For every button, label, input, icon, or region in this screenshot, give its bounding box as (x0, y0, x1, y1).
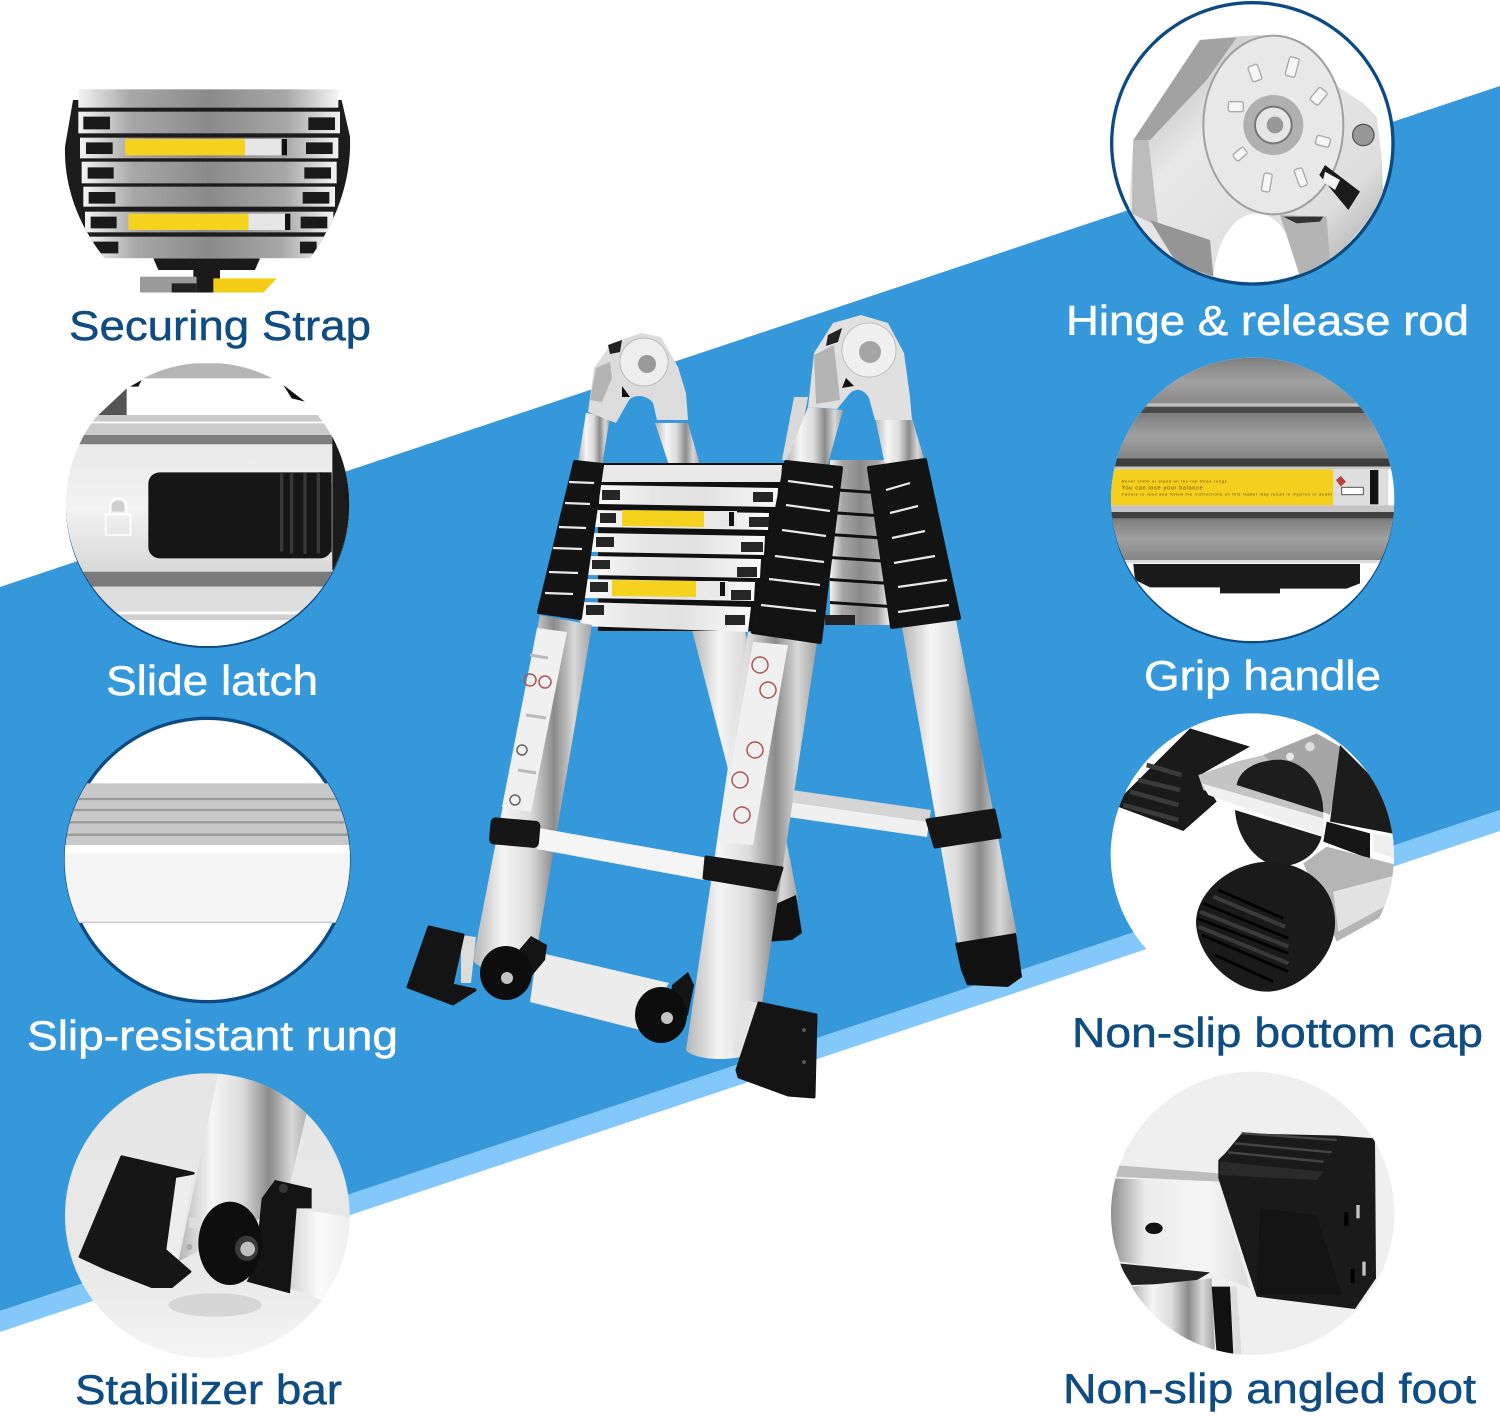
background: light blue stripe (0, 810, 1500, 1332)
panel: non-slip angled foot (1063, 1072, 1476, 1412)
photo: folded ladder rungs (64, 89, 350, 293)
right wheel (635, 972, 694, 1043)
left hinge (588, 333, 688, 423)
rung label: yellow warning 1 (622, 510, 737, 527)
rear right band (927, 810, 1000, 847)
rear left leg (692, 630, 798, 912)
photo: grip handle (1107, 357, 1400, 650)
panel: securing strap (50, 87, 371, 349)
rear rung (788, 790, 931, 837)
panel: hinge and release rod (1066, 1, 1469, 344)
right hinge rear tube (875, 417, 925, 470)
right foot (733, 1000, 816, 1097)
label: non-slip bottom cap: Non-slip bottom cap (1072, 1009, 1483, 1056)
left sticker (502, 628, 567, 812)
rear frame strip (782, 397, 808, 462)
panel: slide latch (65, 362, 352, 704)
rear rungs (825, 460, 890, 625)
panel: slip-resistant rung (27, 717, 398, 1059)
right hinge (808, 315, 912, 420)
right sticker (718, 642, 788, 845)
rear right cap (955, 933, 1022, 987)
panel: stabilizer bar (62, 1072, 355, 1413)
panel: grip handle (1107, 357, 1400, 699)
left band (489, 817, 541, 848)
label: slip-resistant rung: Slip-resistant rung (27, 1012, 398, 1059)
photo: rung tread (62, 717, 355, 1003)
label: non-slip angled foot: Non-slip angled foot (1063, 1365, 1476, 1412)
label: slide latch: Slide latch (106, 657, 318, 704)
warning label text: Failure to read and follow the instructions on this ladder may result in injuries or death (1122, 492, 1332, 497)
stabilizer bar (530, 952, 669, 1030)
rear sleeve (869, 460, 959, 627)
lower rung (537, 828, 708, 880)
left foot (408, 927, 476, 1004)
label: securing strap: Securing Strap (69, 302, 371, 349)
ladder illustration (408, 315, 1022, 1097)
label: stabilizer bar: Stabilizer bar (75, 1366, 342, 1413)
photo: stabilizer bar wheel (62, 1072, 355, 1365)
right band (704, 857, 782, 890)
right front upper tube (786, 407, 843, 467)
left front leg (473, 615, 592, 971)
label: grip handle: Grip handle (1144, 652, 1381, 699)
left upper tube (578, 413, 610, 465)
rear left cap (765, 895, 802, 942)
photo: slide latch (65, 362, 352, 648)
rung label: yellow warning 2 (612, 580, 728, 597)
photo: hinge (1110, 1, 1395, 286)
front rungs (580, 463, 788, 632)
warning label text: You can lose your balance (1122, 485, 1203, 491)
rear right leg (902, 620, 1017, 945)
label: hinge and release rod: Hinge & release rod (1066, 297, 1469, 344)
warning label text (1122, 478, 1332, 497)
left wheel (480, 936, 547, 1000)
left sleeve (539, 462, 602, 618)
panel: non-slip bottom cap (1072, 713, 1483, 1056)
photo: bottom cap (1111, 713, 1400, 997)
right front leg (686, 632, 817, 1059)
right front sleeve (753, 462, 841, 642)
left hinge rear tube (655, 423, 700, 465)
warning label text: Never climb or stand on the top three rungs (1122, 478, 1227, 483)
photo: angled foot (1110, 1072, 1394, 1355)
